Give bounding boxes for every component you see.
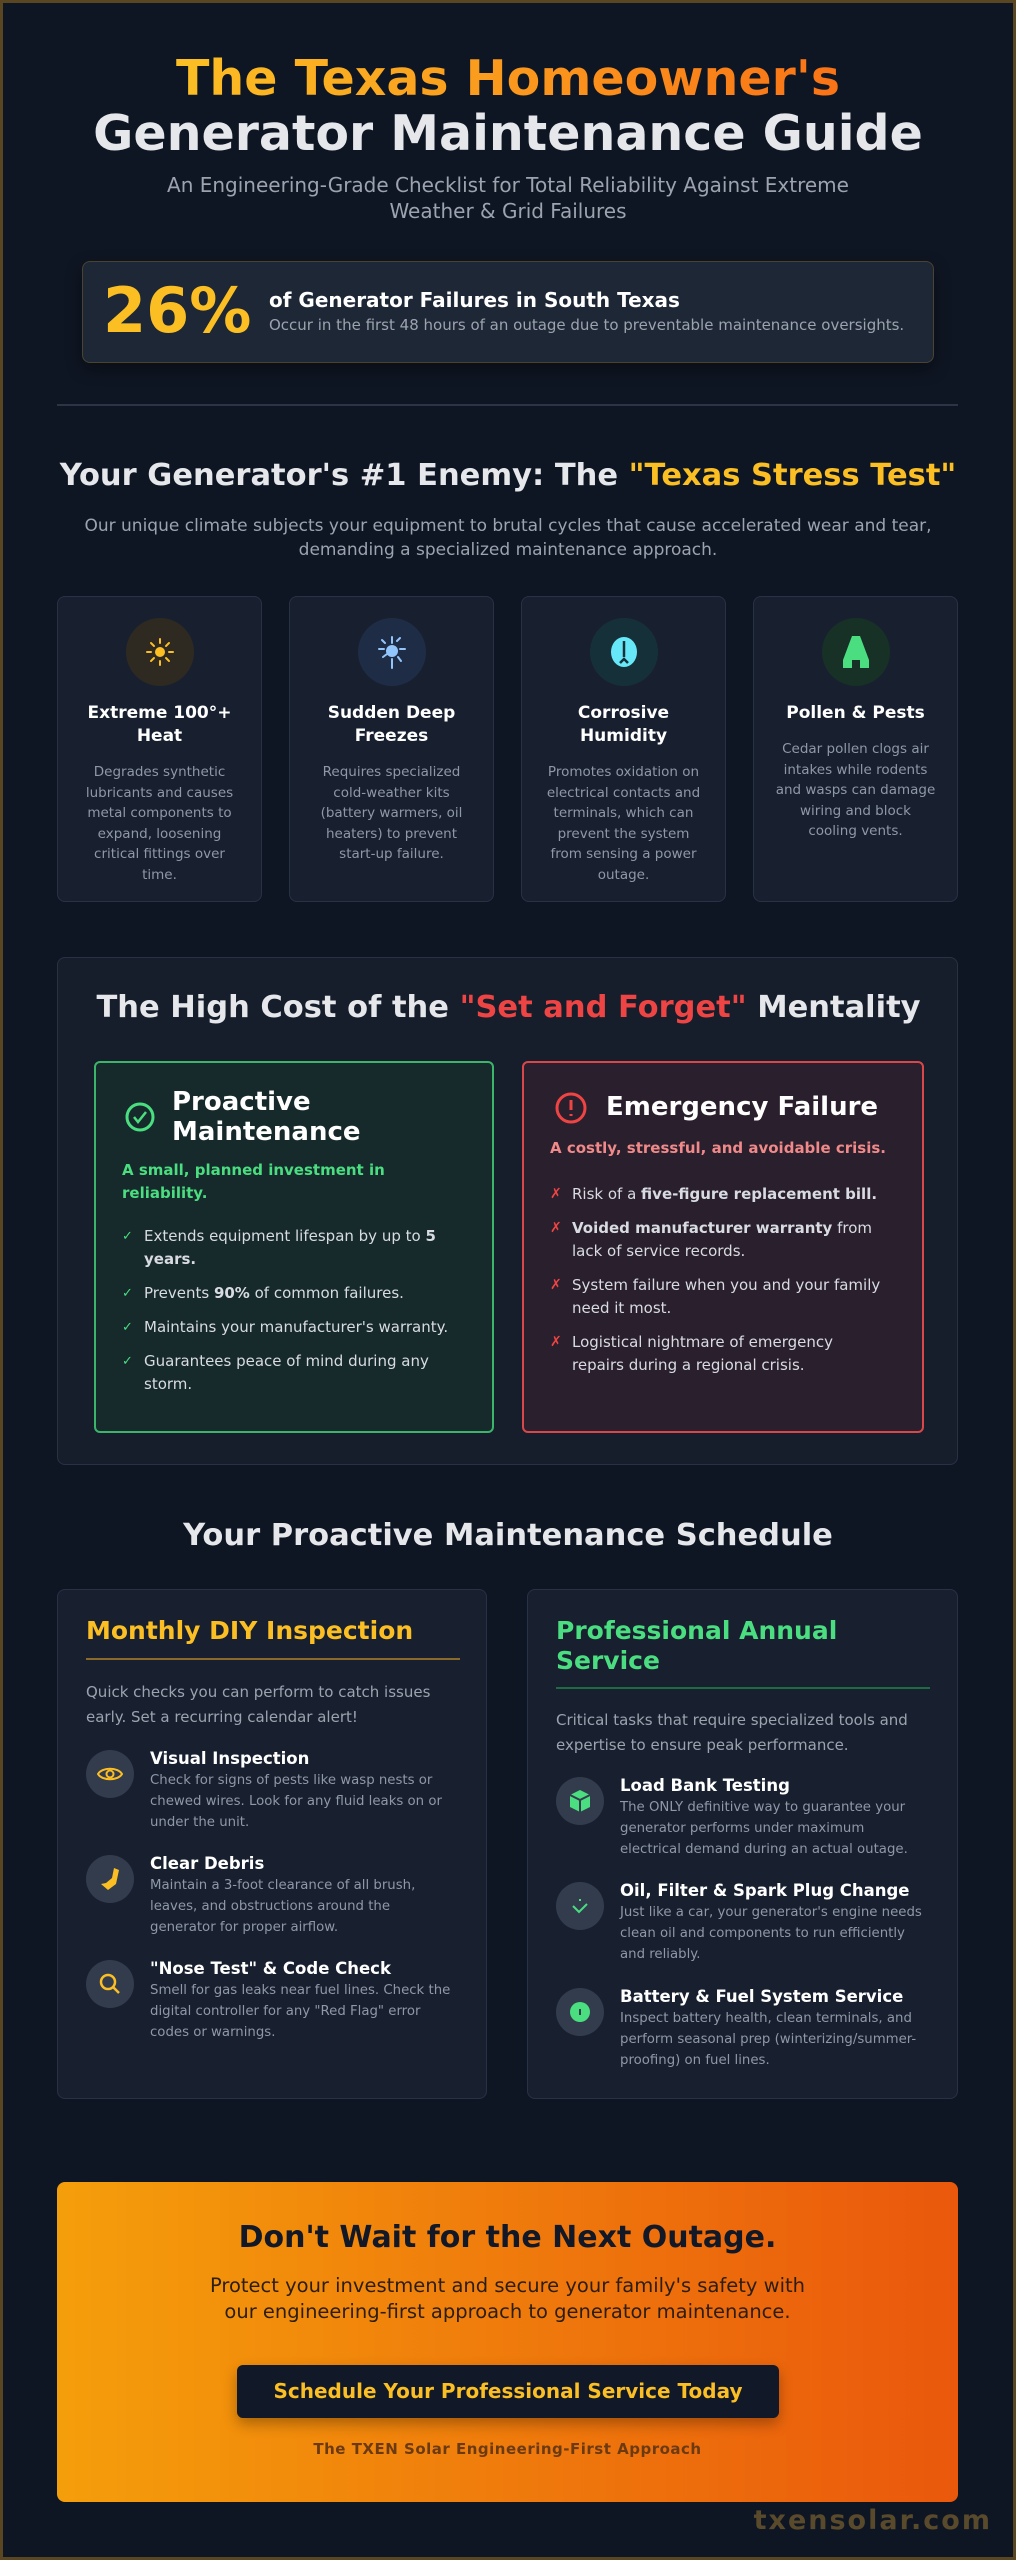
box: proactive: Extends equipment lifespan by up to 5 years. xyxy=(144,1227,436,1268)
item: battery: Inspect battery health, clean terminals, and perform seasonal prep (winterizing/summer-proofing) on fuel lines. xyxy=(620,2011,916,2068)
item: oil filter xyxy=(556,1881,922,1962)
subtitle: An Engineering-Grade Checklist for Total Reliability Against Extreme Weather & Grid Failures xyxy=(167,173,849,223)
title: The Texas Homeowner's xyxy=(176,50,840,107)
box: emergency: Risk of a five-figure replacement bill. xyxy=(572,1185,877,1203)
icon: tree xyxy=(822,618,890,686)
item: load bank: The ONLY definitive way to guarantee your generator performs under maximum electrical demand during an actual outage. xyxy=(620,1800,908,1857)
card: freeze: Requires specialized cold-weather kits (battery warmers, oil heaters) to prevent start-up failure. xyxy=(321,764,462,862)
stat callout xyxy=(82,261,934,363)
box: proactive: Prevents 90% of common failures. xyxy=(144,1284,404,1302)
card: humidity: Corrosive xyxy=(578,703,669,723)
CTA panel: The TXEN Solar Engineering-First Approach xyxy=(313,2440,702,2458)
card: pollen: Pollen & Pests xyxy=(786,703,925,723)
panel: monthly DIY xyxy=(57,1589,487,2099)
watermark: txensolar.com xyxy=(754,2505,992,2536)
icon: check circle xyxy=(126,1102,154,1132)
box: emergency xyxy=(522,1061,924,1433)
item: visual inspection xyxy=(86,1749,442,1830)
box: proactive: Proactive xyxy=(172,1087,311,1117)
heading: schedule: Your Proactive Maintenance Schedule xyxy=(183,1518,833,1553)
box: emergency: System failure when you and your family need it most. xyxy=(572,1276,880,1317)
item: clear debris: Maintain a 3-foot clearance of all brush, leaves, and obstructions around the generator for proper airflow. xyxy=(150,1878,415,1935)
item: clear debris: Clear Debris xyxy=(150,1854,264,1873)
card: freeze xyxy=(289,596,494,902)
panel: monthly DIY: Monthly DIY Inspection xyxy=(86,1616,413,1645)
CTA panel xyxy=(57,2182,958,2502)
stat callout: of Generator Failures in South Texas xyxy=(269,288,680,312)
icon: snowflake xyxy=(358,618,426,686)
item: nose test: Smell for gas leaks near fuel lines. Check the digital controller for any "Red Flag" error codes or warnings. xyxy=(150,1983,450,2040)
card: heat xyxy=(57,596,262,902)
card: heat: Degrades synthetic lubricants and causes metal components to expand, loosening critical fittings over time. xyxy=(86,764,233,883)
stat callout: Occur in the first 48 hours of an outage due to preventable maintenance oversights. xyxy=(269,316,904,334)
icon: sun xyxy=(126,618,194,686)
button: Schedule Your Professional Service Today xyxy=(273,2379,742,2403)
card: humidity xyxy=(521,596,726,902)
box: proactive: Maintains your manufacturer's warranty. xyxy=(144,1318,448,1336)
button xyxy=(237,2365,779,2418)
stat callout: 26% xyxy=(103,274,251,347)
heading: texas stress test: Your Generator's #1 Enemy: The "Texas Stress Test" xyxy=(60,458,956,493)
item: oil filter: Just like a car, your generator's engine needs clean oil and components to run efficiently and reliably. xyxy=(620,1905,922,1962)
item: clear debris xyxy=(86,1854,415,1935)
card: humidity: Humidity xyxy=(580,726,667,746)
panel: professional annual: Professional Annual Service xyxy=(556,1616,837,1675)
CTA panel: Protect your investment and secure your family's safety with our engineering-first approach to generator maintenance. xyxy=(210,2274,805,2323)
intro paragraph: Our unique climate subjects your equipment to brutal cycles that cause accelerated wear and tear, demanding a specialized maintenance approach. xyxy=(84,516,932,560)
box: proactive: Guarantees peace of mind during any storm. xyxy=(144,1352,429,1393)
card: humidity: Promotes oxidation on electrical contacts and terminals, which can prevent the system from sensing a power outage. xyxy=(547,764,700,883)
panel: monthly DIY: Quick checks you can perform to catch issues early. Set a recurring calendar alert! xyxy=(86,1683,430,1726)
item: oil filter: Oil, Filter & Spark Plug Change xyxy=(620,1881,910,1900)
box: proactive xyxy=(94,1061,494,1433)
icon: alert circle xyxy=(556,1092,586,1124)
card: pollen: Cedar pollen clogs air intakes while rodents and wasps can damage wiring and block cooling vents. xyxy=(776,741,935,839)
heading: The High Cost of the "Set and Forget" Mentality xyxy=(96,990,921,1025)
title: Generator Maintenance Guide xyxy=(93,105,923,162)
item: load bank xyxy=(556,1776,908,1857)
box: emergency: A costly, stressful, and avoidable crisis. xyxy=(550,1139,886,1157)
card: heat: Extreme 100°+ xyxy=(87,703,232,723)
item: nose test xyxy=(86,1959,450,2040)
box: proactive: Maintenance xyxy=(172,1117,361,1147)
box: emergency: Logistical nightmare of emergency repairs during a regional crisis. xyxy=(572,1333,833,1374)
card: heat: Heat xyxy=(137,726,182,746)
item: battery: Battery & Fuel System Service xyxy=(620,1987,903,2006)
card: freeze: Freezes xyxy=(355,726,428,746)
card: freeze: Sudden Deep xyxy=(328,703,455,723)
box: emergency: Emergency Failure xyxy=(606,1092,878,1122)
card: pollen xyxy=(753,596,958,902)
box: proactive: A small, planned investment in reliability. xyxy=(122,1161,385,1202)
icon: drop xyxy=(590,618,658,686)
panel: professional annual xyxy=(527,1589,958,2099)
item: visual inspection: Visual Inspection xyxy=(150,1749,309,1768)
panel: stress cards xyxy=(57,596,958,902)
item: visual inspection: Check for signs of pests like wasp nests or chewed wires. Look for any fluid leaks on or under the unit. xyxy=(150,1773,442,1830)
item: load bank: Load Bank Testing xyxy=(620,1776,790,1795)
panel: professional annual: Critical tasks that require specialized tools and expertise to ensure peak performance. xyxy=(556,1711,908,1754)
title xyxy=(93,50,923,162)
item: nose test: "Nose Test" & Code Check xyxy=(150,1959,391,1978)
item: battery xyxy=(556,1987,916,2068)
panel: high cost xyxy=(57,957,958,1465)
box: emergency: Voided manufacturer warranty from lack of service records. xyxy=(572,1219,872,1260)
CTA panel: Don't Wait for the Next Outage. xyxy=(239,2220,776,2255)
